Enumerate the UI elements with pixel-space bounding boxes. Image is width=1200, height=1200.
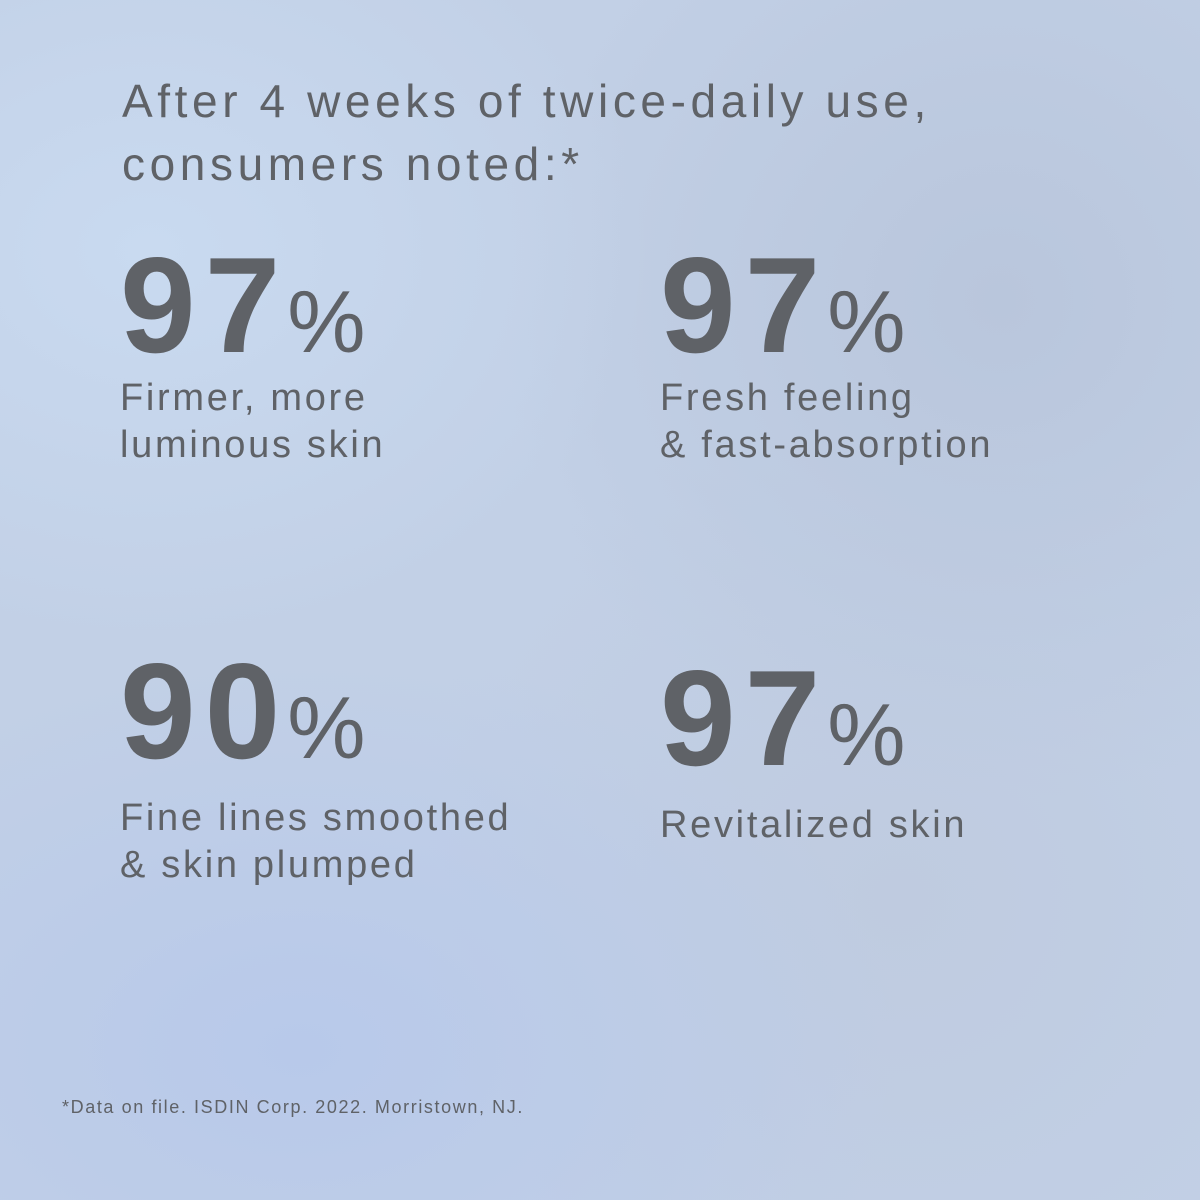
footnote: *Data on file. ISDIN Corp. 2022. Morristown, NJ. xyxy=(62,1097,524,1117)
label fresh xyxy=(660,377,993,466)
number 90%: 90% xyxy=(120,635,366,787)
number 97%: 97% xyxy=(120,229,366,381)
label fine lines: & skin plumped xyxy=(120,844,418,886)
stat: 90% fine lines xyxy=(120,635,511,886)
label fresh: & fast-absorption xyxy=(660,424,993,466)
stat: 97% revitalized xyxy=(660,642,967,846)
number 97%: 97% xyxy=(660,642,906,794)
stat: 97% firmer xyxy=(120,229,385,466)
number 97%: 97% xyxy=(660,229,906,381)
label firmer: luminous skin xyxy=(120,424,385,466)
label fresh: Fresh feeling xyxy=(660,377,915,419)
label firmer xyxy=(120,377,385,466)
label fine lines xyxy=(120,797,511,886)
title: After 4 weeks of twice-daily use, xyxy=(122,75,931,127)
stat: 97% fresh xyxy=(660,229,993,466)
title xyxy=(122,75,931,190)
label revitalized: Revitalized skin xyxy=(660,804,967,846)
label firmer: Firmer, more xyxy=(120,377,368,419)
label fine lines: Fine lines smoothed xyxy=(120,797,511,839)
title: consumers noted:* xyxy=(122,138,584,190)
